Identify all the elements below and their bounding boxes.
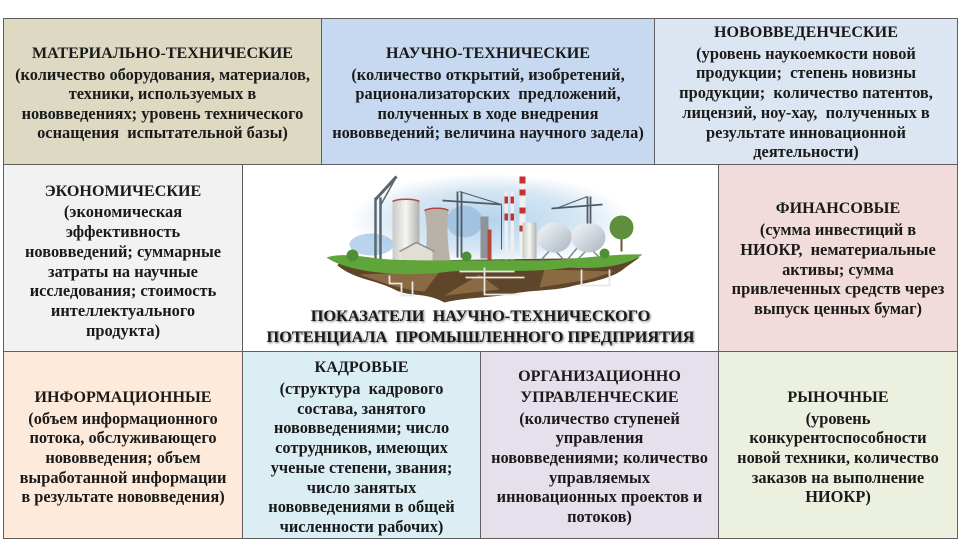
panel: scientific-technical: НАУЧНО-ТЕХНИЧЕСКИЕ	[386, 45, 590, 62]
panel: innovation: результате инновационной	[706, 123, 906, 142]
panel: scientific-technical: (количество открытий, изобретений,	[351, 65, 625, 84]
panel: material-technical: (количество оборудования, материалов,	[15, 65, 310, 84]
panel: innovation: лицензий, ноу-хау, полученных в	[682, 103, 930, 122]
panel: financial: привлеченных средств через	[732, 279, 944, 298]
panel: market: новой техники, количество	[737, 448, 939, 467]
panel: organizational-managerial: управляемых	[549, 468, 650, 487]
soil	[338, 258, 640, 302]
panel: market: заказов на выполнение	[752, 468, 924, 487]
panel: innovation: (уровень наукоемкости новой	[696, 44, 916, 63]
panel: innovation: НОВОВВЕДЕНЧЕСКИЕ	[714, 24, 898, 41]
crane centre	[442, 192, 502, 258]
panel: personnel	[242, 351, 481, 539]
panel: market: РЫНОЧНЫЕ	[787, 389, 889, 406]
panel: market	[718, 351, 958, 539]
central title: ПОКАЗАТЕЛИ НАУЧНО-ТЕХНИЧЕСКОГО	[311, 306, 650, 325]
panel: economic: продукта)	[86, 321, 160, 340]
panel: information: ИНФОРМАЦИОННЫЕ	[34, 389, 212, 406]
panel: personnel: ученые степени, звания;	[271, 458, 452, 477]
crane right	[552, 196, 602, 224]
stacks	[480, 216, 488, 258]
panel: financial: НИОКР, нематериальные	[740, 240, 936, 259]
panel: central illustration and title	[242, 164, 719, 352]
panel: organizational-managerial: управления	[556, 428, 643, 447]
panel: market: НИОКР)	[805, 487, 871, 506]
panel: material-technical: нововведениях; уровень технического	[22, 104, 303, 122]
panel: organizational-managerial: потоков)	[567, 507, 632, 526]
panel: market: (уровень	[806, 409, 870, 428]
panel: economic: (экономическая	[64, 202, 182, 221]
panel: organizational-managerial: нововведениями; количество	[491, 448, 708, 467]
panel: economic: эффективность	[66, 222, 180, 241]
panel: financial: ФИНАНСОВЫЕ	[776, 200, 900, 217]
panel: personnel: нововведениями в общей	[268, 497, 455, 516]
panel: organizational-managerial: УПРАВЛЕНЧЕСКИЕ	[520, 389, 679, 406]
crane left	[376, 176, 396, 262]
panel: market: конкурентоспособности	[749, 428, 927, 447]
panel: information: в результате нововведения)	[21, 487, 225, 506]
grass	[326, 254, 642, 274]
panel: personnel: КАДРОВЫЕ	[315, 359, 408, 376]
panel: scientific-technical	[321, 18, 655, 165]
panel: scientific-technical: рационализаторских предложений,	[355, 84, 621, 103]
panel: organizational-managerial	[480, 351, 719, 539]
panel: information	[3, 351, 243, 539]
panel: organizational-managerial: ОРГАНИЗАЦИОННО	[518, 368, 681, 385]
panel: financial	[718, 164, 958, 352]
panel: material-technical: МАТЕРИАЛЬНО-ТЕХНИЧЕСКИЕ	[32, 45, 293, 62]
panel: organizational-managerial: инновационных проектов и	[497, 487, 702, 506]
panel: innovation	[654, 18, 958, 165]
panel: personnel: состава, занятого	[297, 399, 426, 418]
panel: economic	[3, 164, 243, 352]
panel: personnel: число занятых	[307, 478, 416, 497]
panel: material-technical: оснащения испытательной базы)	[37, 123, 288, 142]
panel: innovation: продукции; количество патентов,	[679, 83, 933, 102]
panel: personnel: нововведениями; число	[274, 418, 449, 437]
panel: scientific-technical: нововведений; величина научного задела)	[332, 123, 644, 142]
spheres	[542, 248, 602, 260]
cooling tower 1	[392, 199, 420, 260]
panel: innovation: продукции; степень новизны	[696, 63, 916, 82]
panel: material-technical	[3, 18, 322, 165]
panel: economic: ЭКОНОМИЧЕСКИЕ	[45, 183, 201, 200]
panel: innovation: деятельности)	[753, 142, 859, 161]
panel: information: потока, обслуживающего	[29, 428, 217, 447]
panel: personnel: численности рабочих)	[280, 517, 443, 536]
panel: economic: интеллектуального	[51, 301, 195, 320]
illustration: industrial plant on a floating island	[326, 176, 642, 302]
cooling tower 2	[424, 208, 450, 262]
panel: economic: нововведений; суммарные	[25, 242, 221, 261]
panel: scientific-technical: полученных в ходе внедрения	[377, 104, 598, 122]
tree	[620, 236, 622, 252]
panel: material-technical: техники, используемых в	[69, 84, 256, 103]
panel: financial: (сумма инвестиций в	[760, 220, 916, 239]
panel: information: (объем информационного	[28, 409, 218, 428]
panel: information: нововведения; объем	[45, 448, 201, 467]
panel: financial: выпуск ценных бумаг)	[754, 299, 922, 318]
panel: economic: исследования; стоимость	[30, 281, 216, 300]
pipes	[390, 268, 610, 296]
central title	[266, 306, 696, 348]
building	[402, 244, 432, 264]
central title: ПОТЕНЦИАЛА ПРОМЫШЛЕННОГО ПРЕДПРИЯТИЯ	[267, 326, 694, 346]
panel: personnel: сотрудников, имеющих	[275, 438, 448, 457]
panel: economic: затраты на научные	[48, 262, 198, 280]
panel: financial: активы; сумма	[782, 260, 894, 278]
panel: information: выработанной информации	[20, 468, 226, 487]
panel: personnel: (структура кадрового	[280, 379, 443, 398]
panel: organizational-managerial: (количество ступеней	[519, 409, 680, 428]
